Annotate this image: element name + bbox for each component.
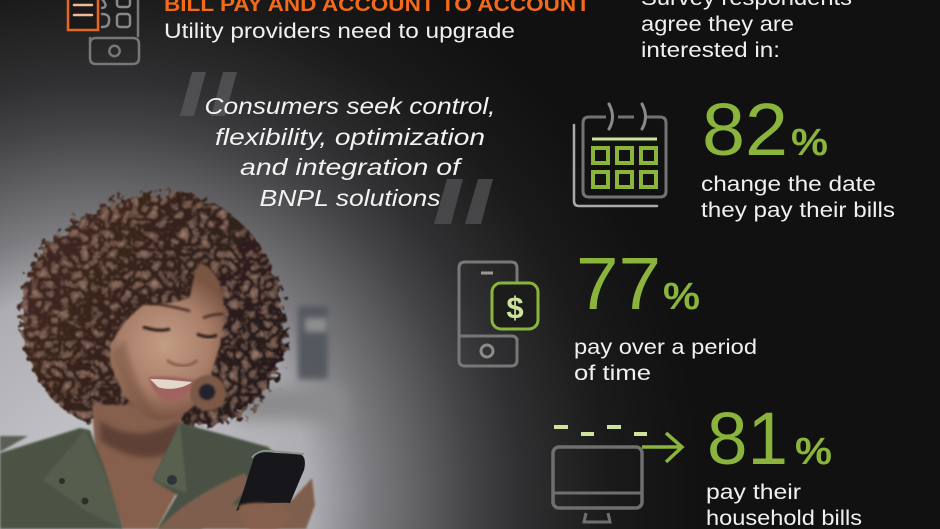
mouth bbox=[148, 376, 197, 402]
stat: 81%: 81 bbox=[707, 397, 788, 480]
photo: woman looking at smartphone bbox=[0, 192, 346, 529]
survey intro text: agree they are bbox=[641, 13, 794, 36]
eyebrows bbox=[147, 303, 223, 318]
icon: phone with dollar badge bbox=[459, 262, 538, 366]
earring bbox=[190, 375, 226, 411]
neck and chest bbox=[92, 405, 183, 529]
stat: 82%: they pay their bills bbox=[701, 199, 895, 222]
eyes bbox=[143, 327, 217, 337]
survey intro text bbox=[641, 0, 852, 62]
pull quote: BNPL solutions bbox=[260, 185, 441, 211]
pull quote: flexibility, optimization bbox=[215, 124, 485, 150]
stat: 82%: change the date bbox=[701, 173, 876, 196]
stat: 82%: % bbox=[791, 122, 828, 164]
subheading: Utility providers need to upgrade bbox=[164, 20, 515, 43]
decorative opening quote mark bbox=[180, 72, 237, 116]
icon: phone with dollar badge: $ bbox=[506, 290, 524, 325]
pull quote bbox=[204, 93, 496, 211]
face bbox=[110, 263, 224, 420]
stat: 82%: 82 bbox=[702, 88, 788, 171]
stat: 77% bbox=[574, 242, 757, 385]
stat: 77%: pay over a period bbox=[574, 336, 757, 359]
nose bbox=[167, 360, 197, 366]
decorative closing quote mark bbox=[434, 179, 493, 224]
icon: phone with bill and keypad bbox=[68, 0, 139, 64]
stat: 81%: % bbox=[795, 431, 832, 473]
pull quote: and integration of bbox=[240, 154, 463, 180]
facial shading bbox=[112, 340, 160, 420]
stat: 81% bbox=[706, 397, 862, 529]
phone bbox=[236, 452, 305, 511]
survey intro text: interested in: bbox=[641, 39, 780, 62]
icon: desktop monitor with payment arrow bbox=[553, 427, 682, 522]
pull quote: Consumers seek control, bbox=[204, 93, 496, 119]
stat: 77%: 77 bbox=[576, 242, 661, 325]
stat: 77%: of time bbox=[574, 362, 651, 385]
stat: 82% bbox=[701, 88, 895, 222]
hair bbox=[21, 192, 286, 427]
hand bbox=[158, 473, 315, 529]
stat: 77%: % bbox=[663, 276, 700, 318]
stat: 81%: pay their bbox=[706, 481, 801, 504]
icon: calendar bbox=[574, 104, 666, 206]
shirt bbox=[0, 428, 123, 529]
